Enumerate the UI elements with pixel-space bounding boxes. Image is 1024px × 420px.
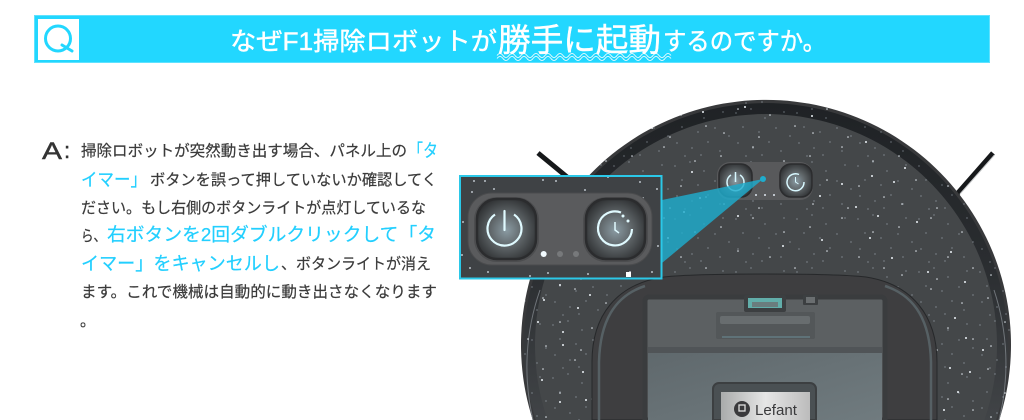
robot body — [521, 100, 1011, 420]
answer label — [42, 138, 70, 165]
answer text: イマー」をキャンセルし — [81, 253, 280, 274]
title: なぜF1掃除ロボットが — [230, 28, 497, 56]
logo badge: Lefant — [755, 402, 798, 419]
bin slot — [716, 312, 815, 339]
enlarged timer button — [583, 197, 648, 262]
logo badge — [713, 383, 816, 420]
icon: Q badge — [38, 19, 79, 60]
logo mark — [734, 401, 750, 417]
answer text: ボタンを誤って押していないか確認してく — [150, 171, 437, 189]
lid highlight — [599, 286, 931, 420]
enlarged power button — [474, 197, 539, 262]
answer text: 掃除ロボットが突然動き出す場合、パネル上の — [81, 142, 407, 160]
header bar — [34, 16, 990, 62]
answer text: ら、 — [81, 228, 106, 245]
side brushes — [538, 153, 994, 194]
answer text: ださい。もし右側のボタンライトが点灯しているな — [81, 199, 426, 217]
robot vacuum — [460, 100, 1011, 420]
zoomed inset — [460, 176, 662, 278]
wavy underline — [497, 54, 671, 60]
dust bin — [645, 295, 885, 420]
answer text: 右ボタンを2回ダブルクリックして「タ — [107, 224, 436, 245]
top lid recess — [592, 274, 937, 420]
answer text: ます。これで機械は自動的に動き出さなくなります — [81, 283, 437, 301]
answer label: A — [42, 138, 62, 165]
answer text: 。 — [80, 313, 96, 330]
answer text: 「タ — [408, 141, 438, 161]
teal latch — [744, 295, 786, 312]
small notch — [803, 295, 818, 305]
answer text — [80, 141, 438, 330]
answer text: イマー」 — [81, 170, 147, 190]
timer button — [780, 164, 812, 197]
title — [230, 22, 826, 58]
speckles — [520, 100, 1010, 420]
title: 勝手に起動 — [498, 22, 661, 58]
power button — [719, 164, 752, 197]
answer label: : — [64, 138, 70, 163]
answer text: 、ボタンライトが消え — [281, 255, 431, 273]
button panel — [717, 162, 813, 200]
indicator dots — [541, 251, 579, 257]
title: するのですか。 — [663, 28, 826, 56]
callout beam — [662, 176, 766, 263]
